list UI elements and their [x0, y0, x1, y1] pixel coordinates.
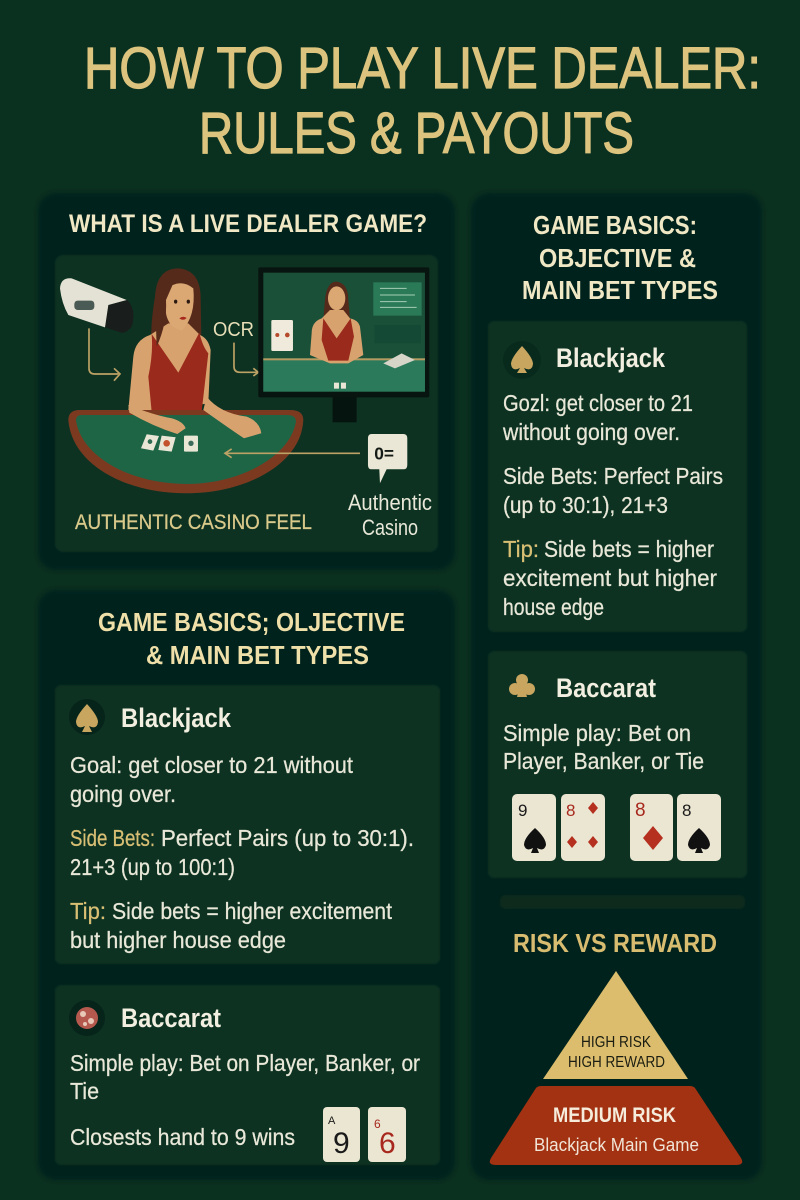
arrow: camera to dealer	[89, 328, 120, 381]
card: blackjack left: Goal: get closer to 21 without	[70, 752, 354, 778]
label: authentic casino	[348, 490, 432, 540]
card: blackjack right: house edge	[503, 594, 604, 620]
heading: what is a live dealer game: WHAT IS A LIVE DEALER GAME?	[69, 210, 427, 238]
illustration: dealer at table	[60, 267, 429, 493]
pyramid tier: high risk: HIGH REWARD	[568, 1054, 665, 1071]
heading: game basics right: OBJECTIVE &	[539, 243, 696, 273]
card: blackjack right: (up to 30:1), 21+3	[503, 492, 668, 518]
card: blackjack left: 21+3 (up to 100:1)	[70, 854, 235, 880]
blackjack table	[68, 410, 303, 493]
panel: game basics left	[38, 590, 455, 1180]
playing cards: 9 8 8 8: 8	[566, 801, 575, 820]
playing cards: 9 8 8 8: 8	[635, 800, 646, 821]
card: baccarat left: Simple play: Bet on Player, Banker, or	[70, 1050, 420, 1076]
icon: club gold	[509, 674, 535, 697]
card: blackjack right: Side Bets: Perfect Pairs	[503, 463, 723, 489]
card: baccarat left	[55, 985, 440, 1165]
card: baccarat left: Baccarat	[121, 1003, 221, 1033]
playing cards: A 9 and 6 6: 6	[379, 1127, 396, 1160]
card: blackjack left: but higher house edge	[70, 927, 286, 953]
playing cards: A 9 and 6 6: 9	[333, 1127, 350, 1160]
card: blackjack left: Side bets = higher excitement	[112, 898, 393, 924]
arrow: OCR to monitor	[234, 343, 258, 376]
icon: speech bubble: 0=	[374, 443, 394, 463]
card: blackjack left: Tip:	[70, 898, 106, 924]
pyramid tier: medium risk: MEDIUM RISK	[553, 1104, 676, 1127]
card: blackjack right	[488, 321, 747, 632]
card: blackjack left: Perfect Pairs (up to 30:1).	[161, 825, 414, 851]
playing cards: 9 8 8 8	[512, 794, 721, 861]
card: blackjack left: Side Bets:	[70, 825, 155, 851]
card: blackjack right: Side bets = higher	[544, 536, 714, 562]
heading: game basics right: GAME BASICS:	[533, 210, 697, 240]
dealer arms	[128, 397, 261, 438]
heading: risk vs reward: RISK VS REWARD	[513, 928, 717, 958]
playing cards: 9 8 8 8: 9	[518, 801, 527, 820]
label: authentic casino feel: AUTHENTIC CASINO FEEL	[75, 511, 312, 534]
heading: game basics left: GAME BASICS; OLJECTIVE	[98, 607, 405, 637]
pyramid tier: medium risk	[490, 1086, 742, 1165]
card: blackjack left	[55, 685, 440, 964]
arrow: bubble to table	[225, 449, 360, 458]
icon: speech bubble	[368, 434, 407, 483]
card: blackjack right: Gozl: get closer to 21	[503, 390, 693, 416]
label: authentic casino: Authentic	[348, 490, 432, 515]
pyramid tier: medium risk: Blackjack Main Game	[534, 1135, 699, 1155]
playing cards: A 9 and 6 6	[323, 1107, 406, 1162]
divider bar	[500, 895, 745, 909]
heading: game basics right	[522, 210, 718, 305]
card: blackjack left: Blackjack	[121, 703, 232, 733]
card: blackjack right: without going over.	[502, 419, 680, 445]
heading: game basics right: MAIN BET TYPES	[522, 275, 718, 305]
icon: chip	[69, 1000, 105, 1036]
heading: game basics left: & MAIN BET TYPES	[146, 640, 369, 670]
pyramid tier: high risk: HIGH RISK	[581, 1034, 652, 1051]
card: baccarat right: Baccarat	[556, 673, 656, 703]
card: baccarat right: Player, Banker, or Tie	[503, 748, 704, 774]
icon: spade	[69, 699, 105, 735]
card: baccarat right: Simple play: Bet on	[503, 720, 691, 746]
title: RULES & PAYOUTS	[199, 101, 634, 166]
label: OCR: OCR	[213, 319, 254, 341]
monitor	[258, 267, 429, 422]
card: blackjack left: going over.	[70, 781, 176, 807]
pyramid chart	[490, 971, 742, 1165]
card: blackjack right: excitement but higher	[503, 565, 717, 591]
cards on table	[141, 434, 198, 452]
playing cards: 9 8 8 8: 8	[682, 801, 691, 820]
title	[84, 36, 761, 166]
card: blackjack right: Blackjack	[556, 343, 666, 373]
panel: what is a live dealer game	[38, 193, 455, 570]
panel: game basics right	[471, 193, 762, 1180]
icon: spade gold	[503, 341, 541, 379]
card: baccarat right	[488, 651, 747, 878]
playing cards: A 9 and 6 6: 6	[374, 1117, 381, 1131]
label: authentic casino: Casino	[362, 515, 418, 540]
icon: camera	[60, 278, 133, 333]
heading: game basics left	[98, 607, 405, 670]
card: blackjack right: Tip:	[503, 536, 539, 562]
playing cards: A 9 and 6 6: A	[328, 1115, 336, 1127]
card: baccarat left: Closests hand to 9 wins	[70, 1124, 295, 1150]
card: baccarat left: Tie	[70, 1078, 99, 1104]
pyramid tier: high risk	[543, 971, 688, 1079]
dealer hair and body	[128, 268, 211, 413]
